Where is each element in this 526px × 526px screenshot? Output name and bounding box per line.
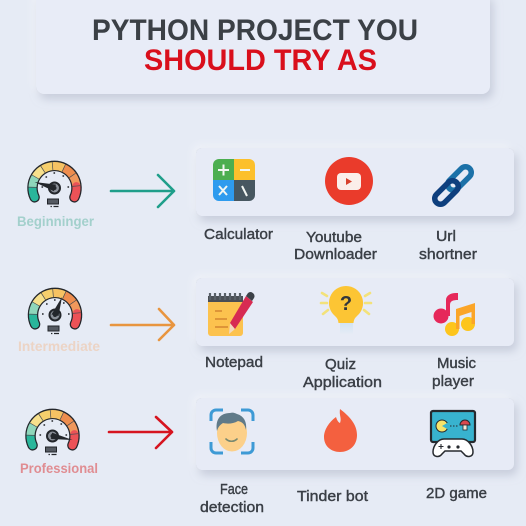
label: 2D game: 2D game (426, 486, 487, 502)
icon: beginner gauge (28, 162, 80, 206)
panel: intermediate projects (196, 278, 514, 346)
label: Quiz Application: Quiz (325, 357, 356, 373)
icon: tinder flame (324, 409, 357, 452)
question mark: ? (340, 293, 352, 315)
arrow: red (109, 417, 172, 448)
panel: professional projects (196, 398, 514, 470)
label: Url shortner (419, 229, 477, 263)
label: Face detection (200, 482, 264, 516)
icon: youtube (325, 157, 373, 205)
icon: face detection (211, 410, 253, 453)
panel: beginner projects (196, 148, 514, 216)
title line 1: PYTHON PROJECT YOU (92, 14, 418, 47)
icon: professional gauge (26, 410, 78, 454)
label: Quiz Application: Application (303, 375, 382, 391)
panel: title (36, 0, 490, 94)
icon: idea bulb (321, 286, 371, 334)
icon: notepad (208, 292, 254, 336)
icon: intermediate gauge (29, 289, 81, 334)
label: Youtube Downloader (294, 230, 377, 263)
arrow: teal (111, 175, 174, 207)
label: Music player: Music (437, 356, 476, 372)
label: Quiz Application (303, 357, 382, 391)
label: Url shortner: Url (436, 229, 456, 245)
label: Face detection: Face (220, 482, 248, 498)
label: Face detection: detection (200, 500, 264, 516)
label: Music player (432, 356, 476, 390)
label: Intermediate: Intermediate (18, 339, 100, 354)
arrow: orange (111, 309, 174, 340)
label: Calculator: Calculator (204, 227, 273, 243)
icon: 2D game (431, 411, 475, 456)
label: Url shortner: shortner (419, 247, 477, 263)
label: Youtube Downloader: Downloader (294, 247, 377, 263)
label: Notepad: Notepad (205, 355, 263, 371)
label: Music player: player (432, 374, 474, 390)
label: Tinder bot: Tinder bot (297, 489, 368, 505)
icon: music notes (434, 293, 475, 336)
icon: chain link (432, 164, 474, 207)
label: Professional: Professional (20, 461, 98, 476)
label: Youtube Downloader: Youtube (306, 230, 362, 246)
title line 2: SHOULD TRY AS (144, 44, 377, 77)
label: Beginninger: Beginninger (17, 214, 95, 229)
icon: calculator (213, 159, 255, 201)
